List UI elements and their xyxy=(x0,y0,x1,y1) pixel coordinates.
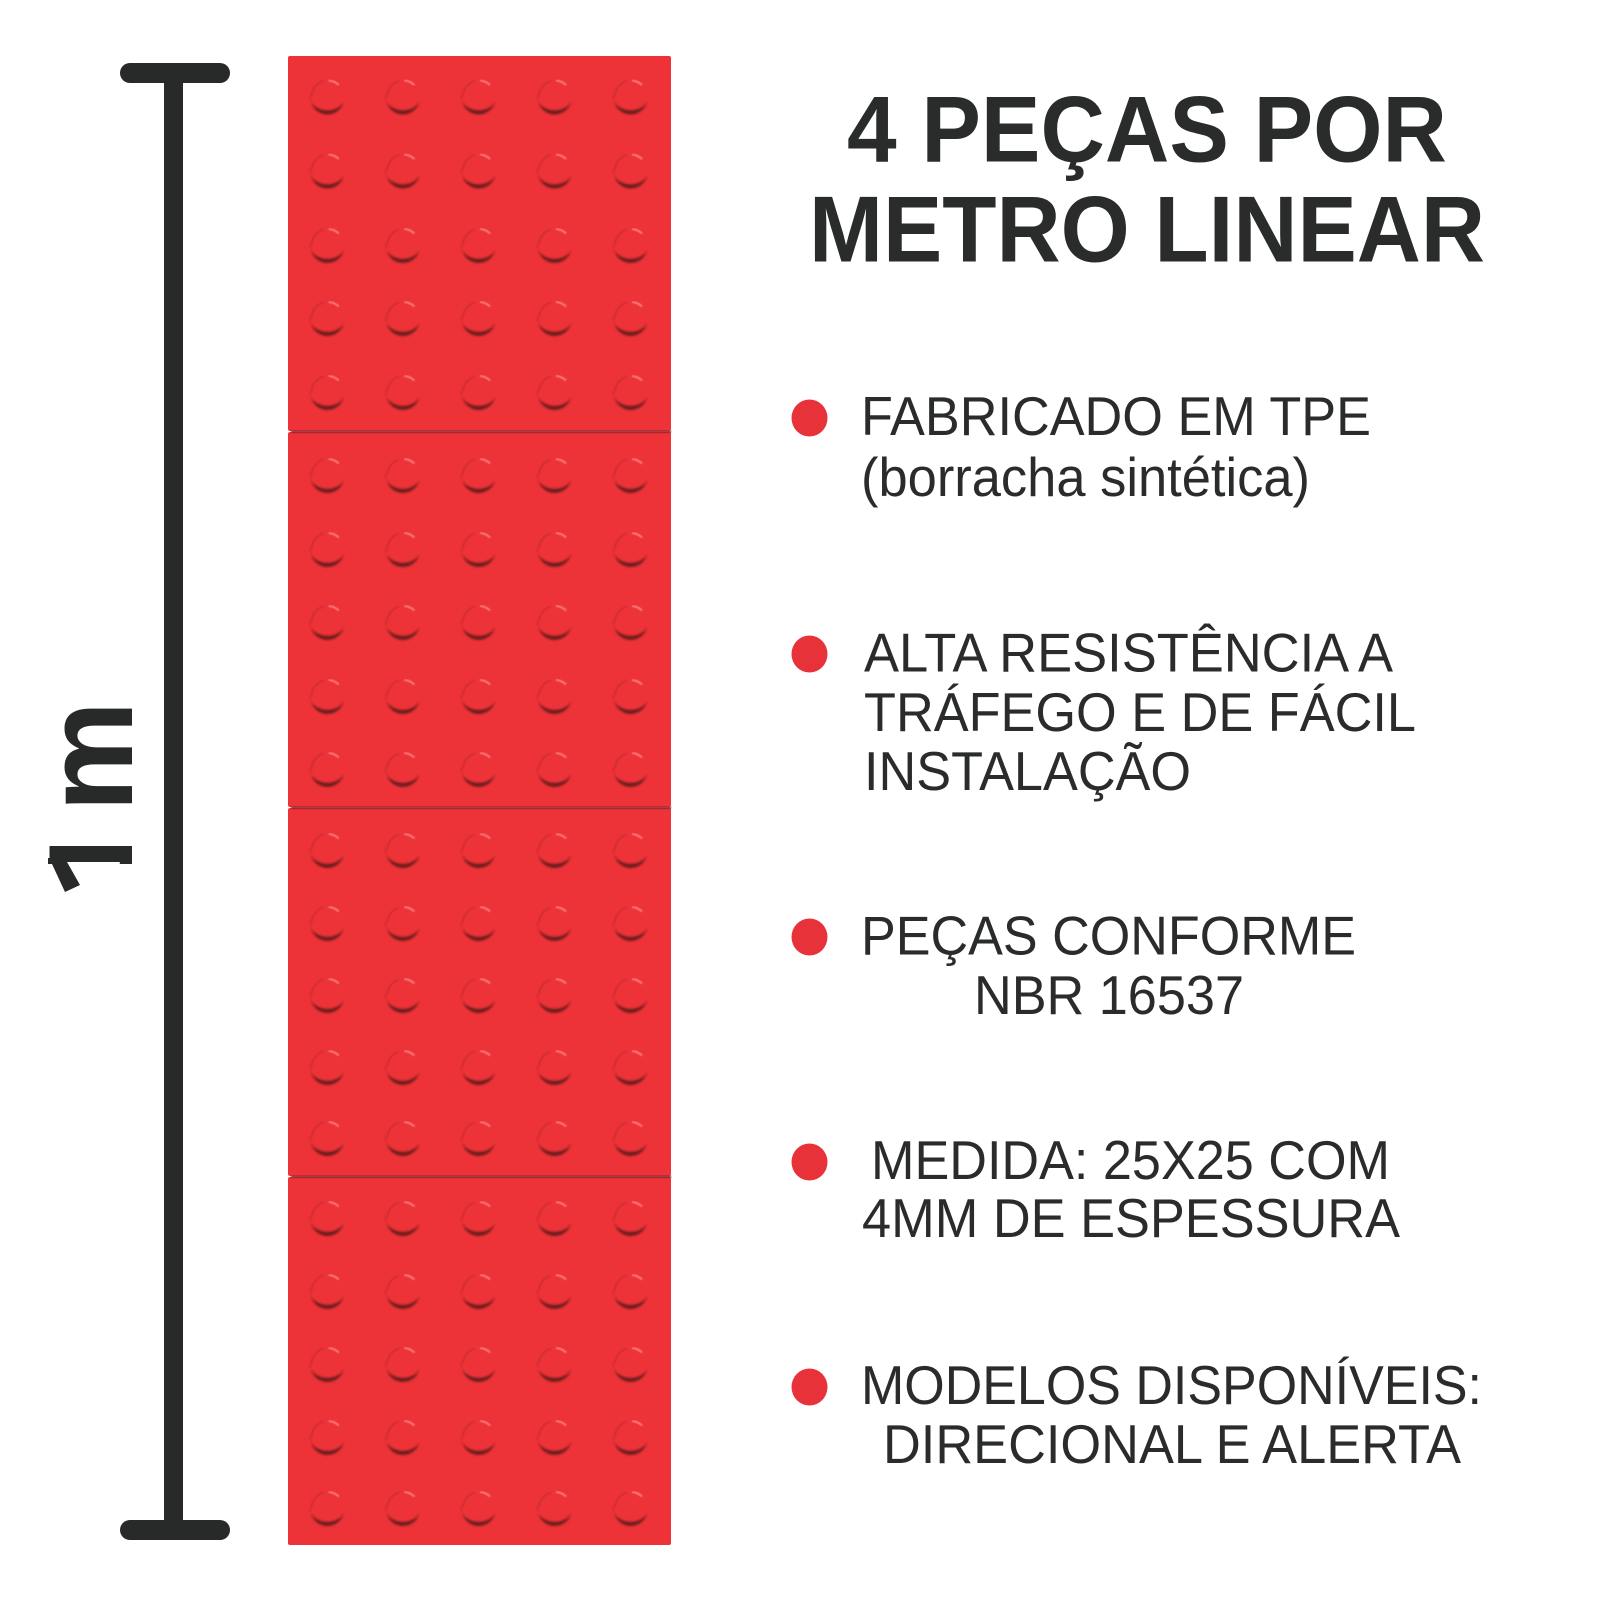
tactile tiles xyxy=(288,56,671,1545)
bullet xyxy=(792,400,828,436)
feature: models xyxy=(792,1354,1482,1475)
tile 1 xyxy=(288,56,671,431)
text: size xyxy=(862,1129,1400,1249)
feature: resistance xyxy=(792,622,1416,802)
feature: size xyxy=(792,1129,1400,1249)
measure label: m xyxy=(20,701,159,812)
text: size: MEDIDA: 25X25 COM xyxy=(871,1129,1390,1191)
title: METRO LINEAR xyxy=(809,176,1485,282)
text: standard xyxy=(861,904,1356,1026)
text: models: MODELOS DISPONÍVEIS: xyxy=(861,1354,1482,1416)
text: material: FABRICADO EM TPE xyxy=(861,385,1371,447)
feature: material xyxy=(792,385,1371,508)
tile 2 xyxy=(288,432,671,807)
feature: standard xyxy=(792,904,1356,1026)
measure bar: 1 metre xyxy=(120,63,230,1540)
text: standard: PEÇAS CONFORME xyxy=(861,904,1356,966)
tile 4 xyxy=(288,1177,671,1545)
text: resistance: ALTA RESISTÊNCIA A xyxy=(864,622,1393,684)
text: material: (borracha sintética) xyxy=(861,446,1310,508)
title: 4 PEÇAS POR xyxy=(847,76,1447,182)
bullet xyxy=(792,1368,828,1406)
text: models: DIRECIONAL E ALERTA xyxy=(883,1413,1461,1475)
text: material xyxy=(861,385,1371,508)
text: resistance: TRÁFEGO E DE FÁCIL xyxy=(864,681,1416,743)
text: resistance: INSTALAÇÃO xyxy=(864,740,1191,802)
text: resistance xyxy=(864,622,1416,802)
tile 3 xyxy=(288,808,671,1176)
bullet xyxy=(792,636,828,672)
measure label: 1 xyxy=(24,823,158,890)
text: standard: NBR 16537 xyxy=(974,964,1244,1026)
text: size: 4MM DE ESPESSURA xyxy=(862,1187,1400,1249)
bullet xyxy=(792,1144,828,1180)
measure label xyxy=(20,701,159,900)
bullet xyxy=(792,918,828,956)
text: models xyxy=(861,1354,1482,1475)
title xyxy=(809,76,1485,282)
